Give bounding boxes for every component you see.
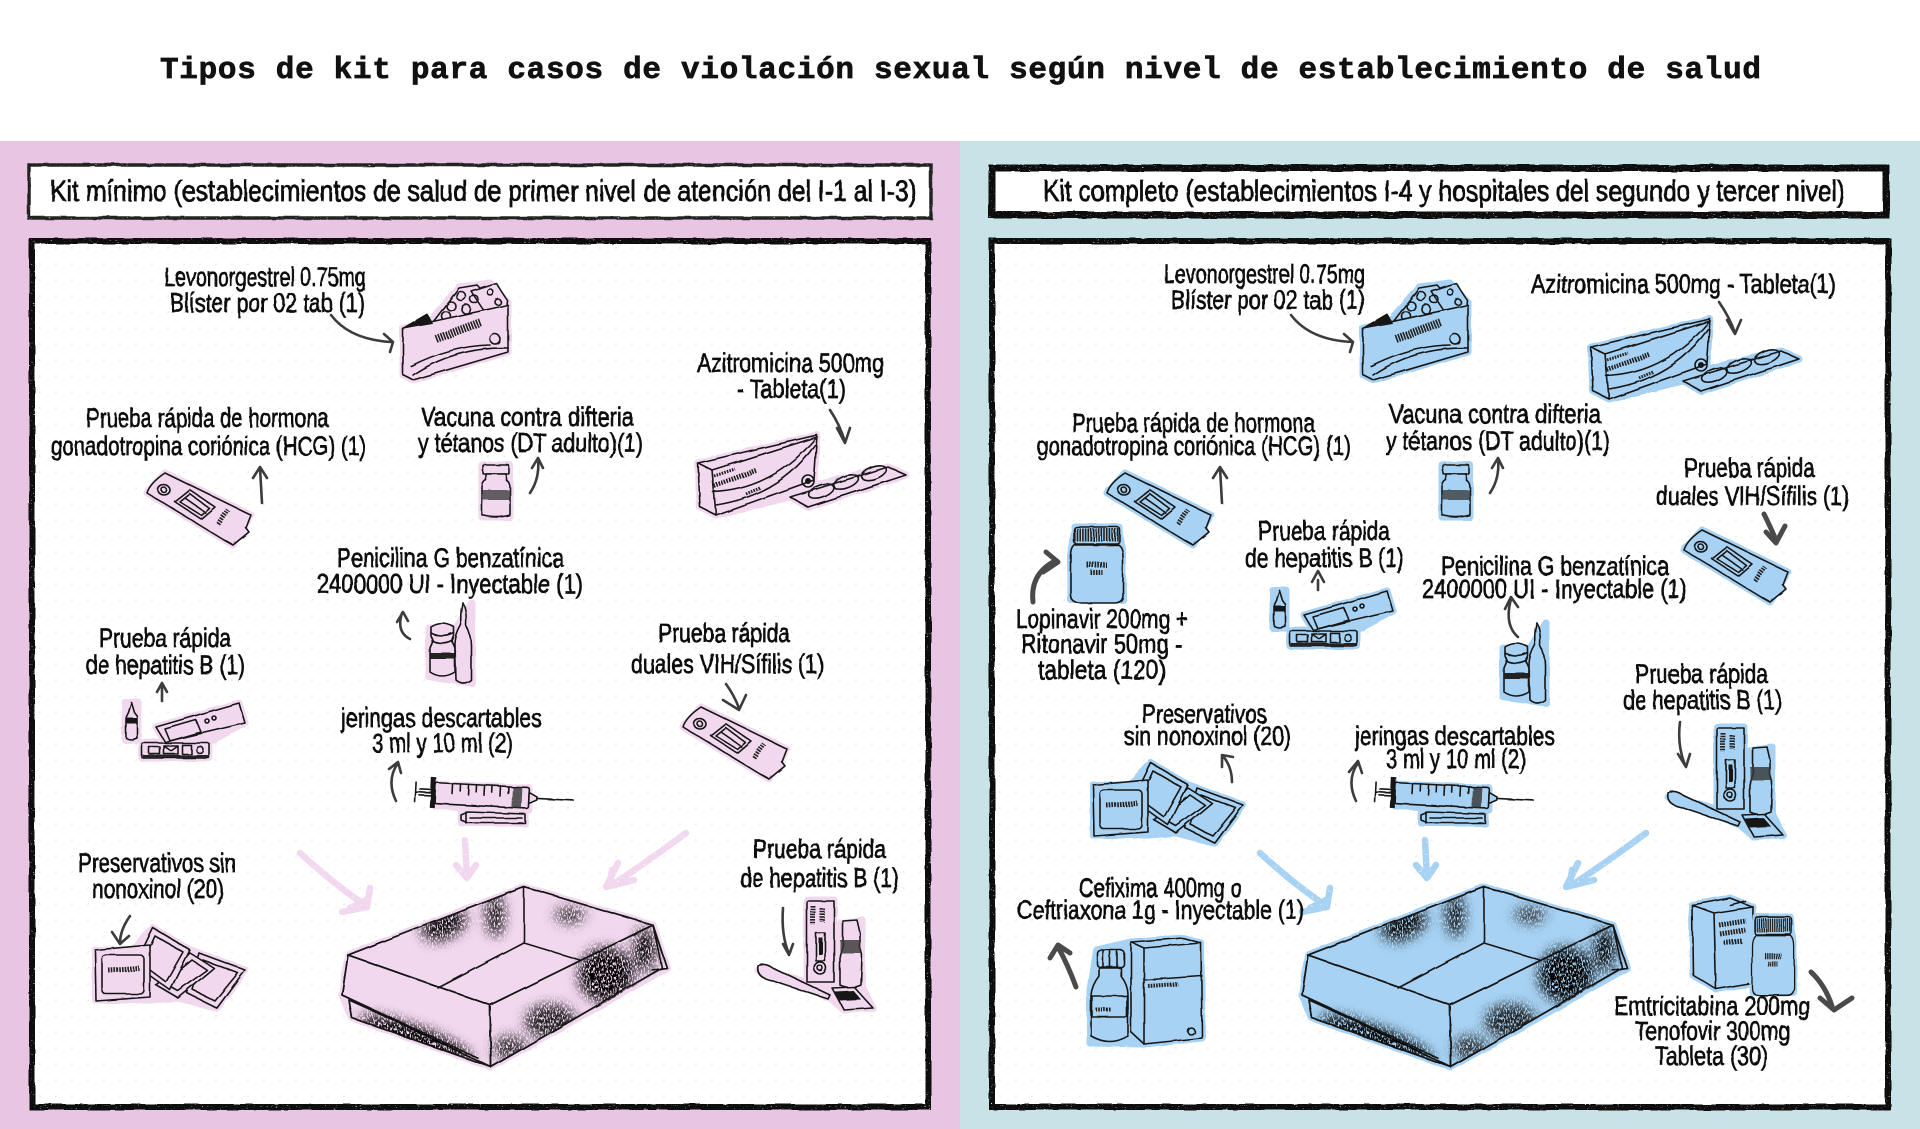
- label: emtricitabina: [1614, 991, 1810, 1071]
- icon: azitromicina: [698, 435, 906, 515]
- label: dual test: [1656, 453, 1849, 511]
- label: HCG: [51, 403, 366, 461]
- arrow: levonorgestrel: [1291, 315, 1353, 352]
- icon: syringe: [414, 777, 575, 823]
- arrow: condoms: [112, 916, 130, 944]
- label: vacuna: [418, 402, 643, 458]
- label: dual test: [631, 618, 824, 679]
- label: azitromicina: [697, 348, 884, 404]
- label: HCG: Prueba rápida de hormona: [1072, 408, 1316, 438]
- icon: penicilina: [429, 603, 472, 683]
- icon: dual test: [1684, 530, 1788, 602]
- panel: kit mínimo: [29, 165, 931, 1109]
- icon: syringe: [1374, 777, 1535, 823]
- icon: lopinavir bottle: [1071, 527, 1123, 603]
- label: syringe: [1354, 721, 1555, 774]
- arrow: cefixima: [1050, 945, 1076, 987]
- drawing frame: kit completo: [990, 239, 1890, 1109]
- icon: hepatitis B kit: [1668, 727, 1783, 837]
- label: penicilina: 2400000 UI - Inyectable (1): [317, 569, 583, 599]
- label: hepatitis B kit: Prueba rápida: [1635, 659, 1769, 689]
- illustrations and labels: kit completo: [1016, 259, 1852, 1071]
- arrow: syringe: [389, 762, 401, 801]
- heading box: kit completo: [989, 165, 1889, 218]
- label: cefixima: Ceftriaxona 1g - Inyectable (1): [1017, 895, 1304, 925]
- arrow: hepatitis B kit: [1678, 722, 1690, 767]
- label: condoms: nonoxinol (20): [92, 874, 224, 904]
- label: levonorgestrel: Levonorgestrel 0.75mg: [164, 262, 366, 292]
- label: vacuna: [1386, 399, 1610, 456]
- heading box: kit mínimo: [29, 165, 931, 218]
- label: hepatitis B: de hepatitis B (1): [86, 650, 245, 680]
- label: condoms: [78, 848, 236, 904]
- label: condoms: Preservativos: [1142, 699, 1267, 729]
- label: HCG: Prueba rápida de hormona: [86, 403, 330, 433]
- arrow: azitromicina: [1719, 302, 1741, 334]
- heading box: kit mínimo: Kit mínimo (establecimientos de salud de primer nivel de atención del I-1 al I-3): [50, 175, 917, 208]
- label: cefixima: [1017, 873, 1304, 925]
- label: penicilina: 2400000 UI - Inyectable (1): [1422, 574, 1687, 604]
- label: levonorgestrel: [1164, 259, 1365, 315]
- label: condoms: Preservativos sin: [78, 848, 236, 878]
- label: vacuna: Vacuna contra difteria: [1389, 399, 1602, 429]
- label: azitromicina: Azitromicina 500mg - Tableta(1): [1531, 269, 1836, 299]
- title: Tipos de kit para casos de violación sexual según nivel de establecimiento de salud: [160, 53, 1761, 88]
- label: HCG: gonadotropina coriónica (HCG) (1): [1037, 431, 1351, 461]
- label: vacuna: Vacuna contra difteria: [421, 402, 635, 432]
- label: HCG: [1037, 408, 1351, 461]
- label: hepatitis B: de hepatitis B (1): [1245, 543, 1404, 573]
- illustrations and labels: kit mínimo: [51, 262, 906, 1070]
- label: levonorgestrel: Blíster por 02 tab (1): [170, 288, 365, 318]
- label: emtricitabina: Tableta (30): [1655, 1041, 1768, 1071]
- label: penicilina: Penicilina G benzatínica: [337, 543, 565, 573]
- label: emtricitabina: Emtricitabina 200mg: [1614, 991, 1810, 1021]
- label: hepatitis B kit: [740, 834, 899, 893]
- label: hepatitis B kit: de hepatitis B (1): [1623, 685, 1782, 715]
- label: levonorgestrel: Blíster por 02 tab (1): [1171, 285, 1365, 315]
- label: syringe: jeringas descartables: [1354, 721, 1555, 751]
- icon: hepatitis B test small: [1273, 590, 1393, 646]
- arrows into box: [300, 833, 686, 912]
- label: lopinavir: tableta (120): [1038, 655, 1166, 685]
- arrow: penicilina: [1505, 597, 1518, 637]
- label: syringe: [340, 703, 542, 758]
- icon: open cardboard box: [342, 887, 667, 1070]
- icon: dual test: [683, 707, 787, 779]
- label: vacuna: y tétanos (DT adulto)(1): [1386, 426, 1610, 456]
- arrow: emtricitabina: [1811, 972, 1852, 1010]
- icon: levonorgestrel box: [403, 283, 508, 380]
- label: dual test: duales VIH/Sífilis (1): [631, 649, 824, 679]
- label: levonorgestrel: Levonorgestrel 0.75mg: [1164, 259, 1365, 289]
- icon: condoms: [95, 928, 245, 1008]
- arrow: penicilina: [397, 612, 410, 639]
- icon: open cardboard box: [1302, 887, 1627, 1070]
- drawing frame: kit mínimo: [30, 239, 930, 1109]
- arrow: lopinavir: [1033, 552, 1058, 602]
- icon: hepatitis B test small: [125, 702, 245, 758]
- label: HCG: gonadotropina coriónica (HCG) (1): [51, 431, 366, 461]
- icon: emtricitabina box and bottle: [1692, 898, 1794, 995]
- label: dual test: Prueba rápida: [658, 618, 791, 648]
- arrow: condoms: [1222, 755, 1233, 782]
- icon: HCG test: [1107, 473, 1211, 545]
- arrow: dual test: [723, 684, 746, 710]
- panel: kit completo: [989, 165, 1890, 1109]
- label: cefixima: Cefixima 400mg o: [1079, 873, 1242, 903]
- label: lopinavir: Lopinavir 200mg +: [1016, 604, 1188, 634]
- label: hepatitis B kit: de hepatitis B (1): [740, 863, 899, 893]
- arrow: hepatitis B small: [157, 683, 167, 701]
- icon: levonorgestrel box: [1363, 283, 1468, 380]
- label: hepatitis B kit: [1623, 659, 1782, 715]
- icon: cefixima bottle and box: [1090, 938, 1202, 1044]
- icon: hepatitis B kit: [758, 900, 873, 1010]
- icon: penicilina: [1503, 623, 1546, 703]
- arrow: HCG: [1213, 467, 1227, 503]
- label: lopinavir: Ritonavir 50mg -: [1021, 629, 1182, 659]
- label: syringe: 3 ml y 10 ml (2): [372, 728, 513, 758]
- label: condoms: [1124, 699, 1291, 751]
- label: penicilina: Penicilina G benzatínica: [1441, 551, 1670, 581]
- label: hepatitis B: [1245, 516, 1404, 573]
- arrow: HCG: [253, 467, 267, 503]
- icon: vial DT: [1442, 465, 1470, 517]
- label: azitromicina: - Tableta(1): [737, 374, 846, 404]
- arrow: vial DT: [530, 458, 543, 493]
- label: condoms: sin nonoxinol (20): [1124, 721, 1291, 751]
- arrow: syringe: [1349, 761, 1362, 801]
- label: syringe: jeringas descartables: [340, 703, 542, 733]
- icon: azitromicina: [1591, 319, 1799, 399]
- arrow: dual test: [1764, 514, 1785, 543]
- label: penicilina: [317, 543, 583, 599]
- label: hepatitis B: [86, 623, 245, 680]
- label: levonorgestrel: [164, 262, 366, 318]
- icon: condoms: [1093, 763, 1243, 843]
- label: syringe: 3 ml y 10 ml (2): [1386, 744, 1526, 774]
- label: hepatitis B kit: Prueba rápida: [753, 834, 887, 864]
- label: vacuna: y tétanos (DT adulto)(1): [418, 428, 643, 458]
- arrow: hepatitis B small: [1312, 571, 1324, 590]
- arrow: levonorgestrel: [331, 315, 393, 352]
- arrow: hepatitis B kit: [783, 908, 793, 955]
- icon: vial DT: [482, 465, 510, 517]
- label: lopinavir: [1016, 604, 1188, 685]
- arrow: azitromicina: [830, 410, 850, 443]
- label: dual test: duales VIH/Sífilis (1): [1656, 481, 1849, 511]
- label: hepatitis B: Prueba rápida: [99, 623, 232, 653]
- icon: HCG test: [147, 473, 251, 545]
- label: penicilina: [1422, 551, 1687, 604]
- arrows into box: [1260, 833, 1646, 912]
- label: azitromicina: Azitromicina 500mg: [697, 348, 884, 378]
- label: emtricitabina: Tenofovir 300mg: [1635, 1016, 1790, 1046]
- arrow: vial DT: [1490, 458, 1503, 493]
- label: dual test: Prueba rápida: [1684, 453, 1816, 483]
- label: hepatitis B: Prueba rápida: [1258, 516, 1391, 546]
